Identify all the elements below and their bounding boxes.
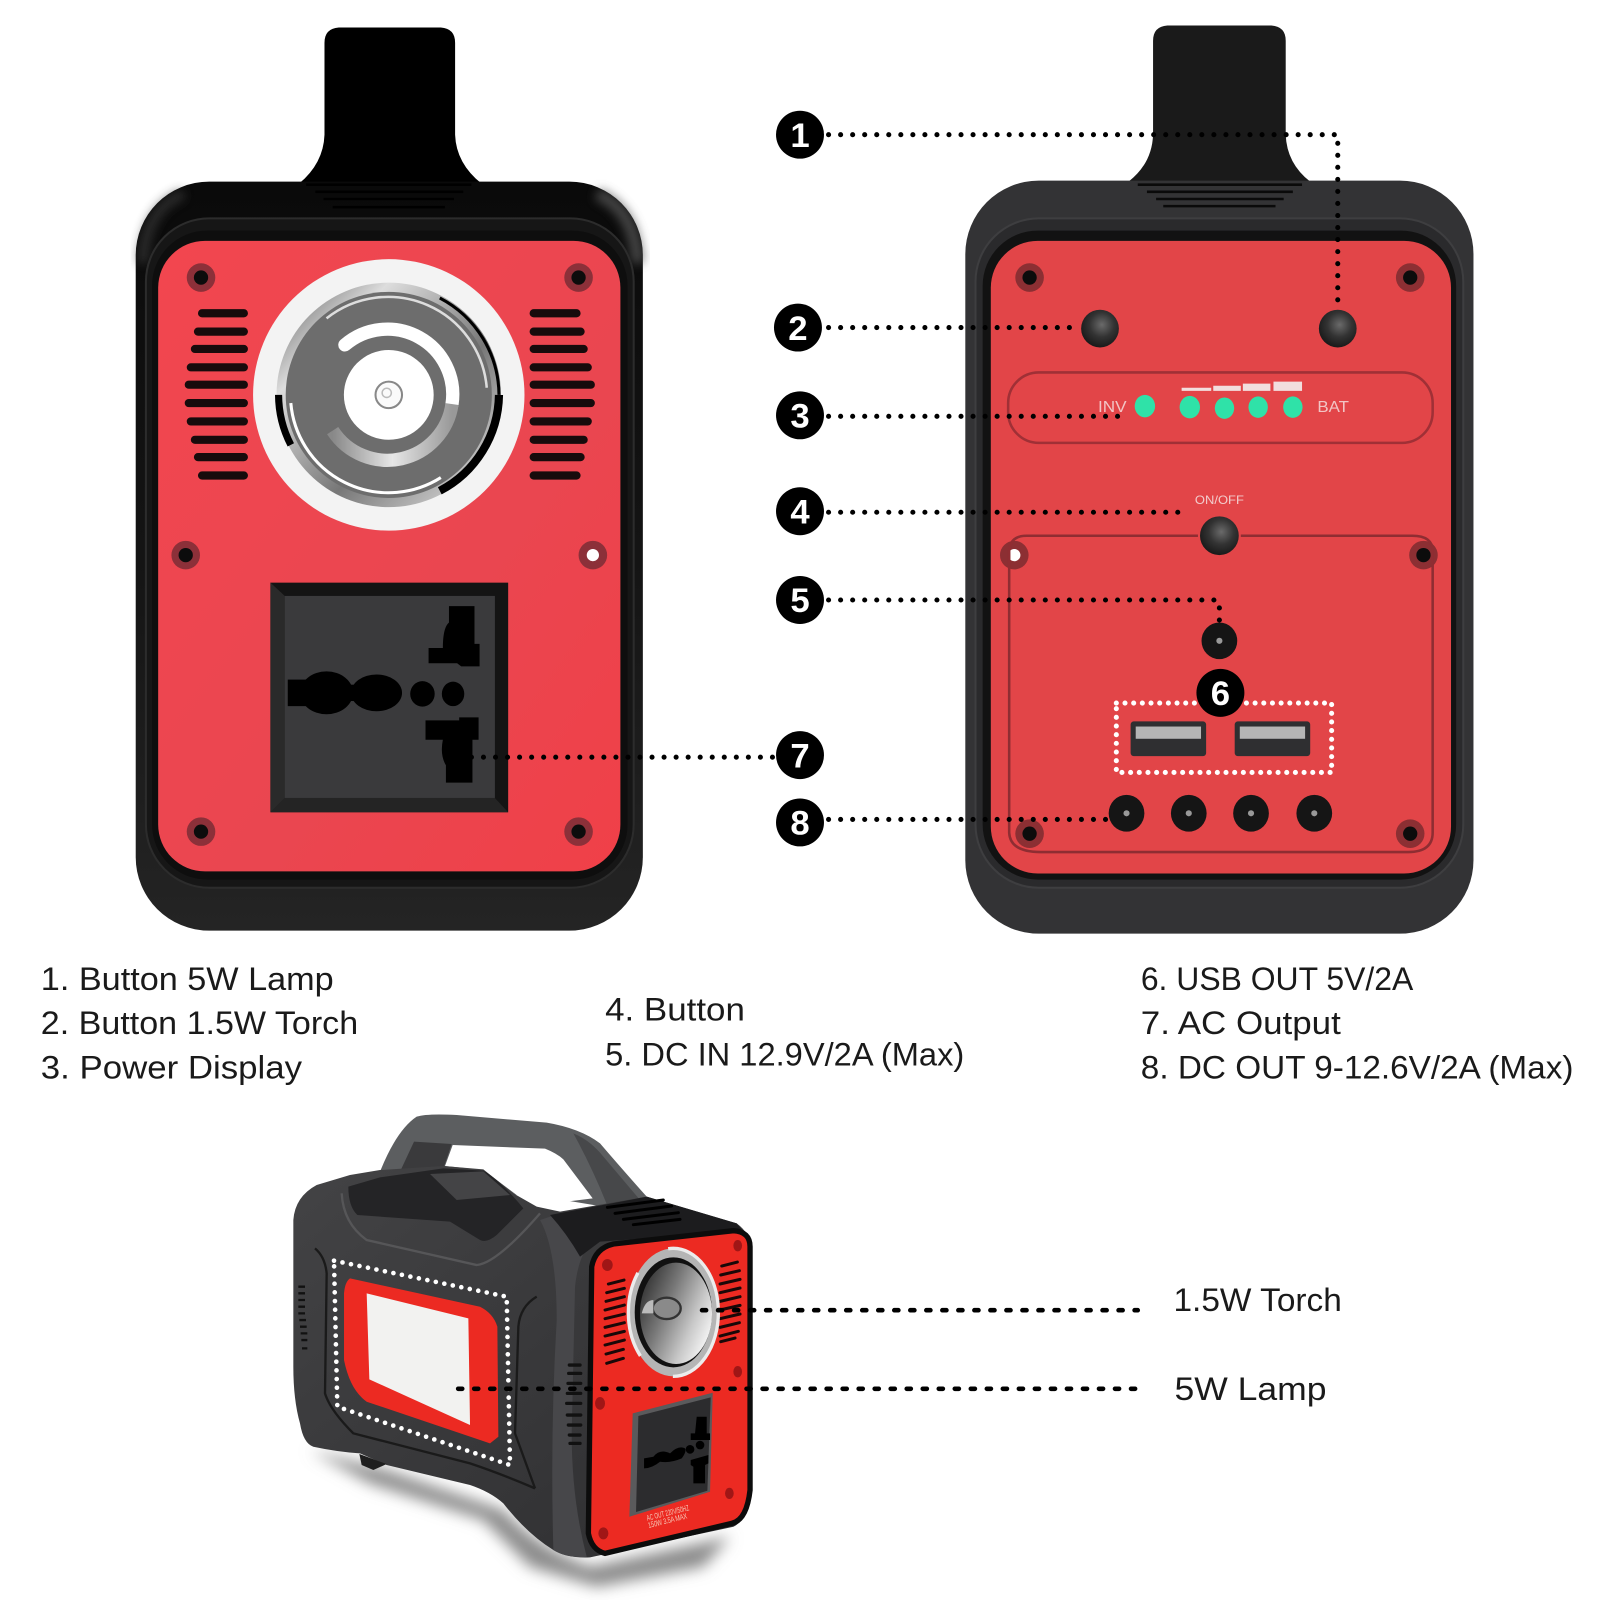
front edge band [540,1213,590,1557]
body shell [136,182,643,931]
socket rating text: AC OUT 220V/50HZ [646,1503,690,1523]
DC in jack [1202,622,1237,659]
legend column: items 1 to 3: 1. Button 5W Lamp [41,960,334,997]
panel: front view of power station [136,28,643,931]
legend column: items 1 to 3 [41,960,358,1086]
legend column: items 6 to 8: 7. AC Output [1141,1004,1341,1041]
ground shadow [310,1450,730,1587]
DC out jacks [1109,795,1332,832]
panel: 3D view of power station [293,1114,751,1587]
badge 2 [774,304,822,352]
front screws [595,1240,742,1539]
torch callout line [702,1308,1138,1312]
torch lens [253,259,524,531]
carry handle [380,1114,647,1207]
badge 6: 6 [1211,675,1230,713]
red back panel [991,241,1451,873]
top vent slots [1138,185,1302,206]
badge 8: 8 [790,805,810,843]
label: 1.5W Torch: 1.5W Torch [1173,1281,1342,1318]
torch lens [628,1248,718,1376]
USB ports [1116,703,1332,772]
lamp callout line [458,1387,1138,1391]
left vent [189,313,244,476]
lower panel outline [1009,536,1433,852]
handle [1129,26,1310,182]
status LEDs [1135,395,1303,419]
number badges [774,111,1244,846]
badge 8 [776,798,824,846]
foot [359,1454,387,1470]
power display panel [1008,372,1433,443]
handle [299,28,482,184]
top black cap [550,1197,743,1257]
badge 7 [776,731,824,779]
screws [1000,263,1438,848]
BAT label: BAT [1317,399,1349,416]
legend column: items 6 to 8 [1141,960,1573,1086]
badge 4 [776,487,824,535]
legend column: items 6 to 8: 8. DC OUT 9-12.6V/2A (Max) [1141,1049,1573,1086]
power button [1200,516,1239,555]
battery level bars [1182,382,1302,391]
badge 6 [1196,669,1244,717]
body shell [965,181,1473,934]
badge 4: 4 [790,493,810,531]
panel: back view of power station [965,26,1473,934]
side lamp [344,1278,498,1443]
legend column: items 1 to 3: 2. Button 1.5W Torch [41,1004,358,1041]
front vents [605,1262,740,1363]
side panel vents [298,1287,307,1348]
shell contour lines [315,1193,540,1488]
dotted lamp outline [334,1261,510,1465]
right vent [534,313,591,476]
AC socket [629,1393,713,1517]
badge 2: 2 [788,310,808,348]
badge 3 [776,391,824,439]
badge 3: 3 [790,398,810,436]
AC socket [270,583,508,812]
badge 1 [776,111,824,159]
top vents [607,1200,680,1225]
red front face [588,1231,750,1553]
top vent slots [306,185,471,207]
lamp and torch buttons [1081,310,1357,347]
legend column: items 4 and 5: 4. Button [605,990,745,1027]
label: 5W Lamp: 5W Lamp [1174,1370,1327,1407]
screws [171,263,607,846]
panel: 3D view of power station: 150W 3.5A MAX [647,1511,688,1530]
ON/OFF label: ON/OFF [1195,493,1244,507]
legend column: items 4 and 5 [605,990,964,1072]
badge 1: 1 [790,117,810,155]
handle recess [348,1168,523,1241]
red front panel [158,241,620,871]
badge 5: 5 [790,582,810,620]
badge 7: 7 [790,737,810,775]
legend column: items 1 to 3: 3. Power Display [41,1049,303,1086]
legend column: items 6 to 8: 6. USB OUT 5V/2A [1141,960,1413,997]
main shell [293,1166,751,1557]
INV label: INV [1098,399,1127,416]
callout lines [471,135,1338,819]
legend column: items 4 and 5: 5. DC IN 12.9V/2A (Max) [605,1035,964,1072]
badge 5 [776,576,824,624]
